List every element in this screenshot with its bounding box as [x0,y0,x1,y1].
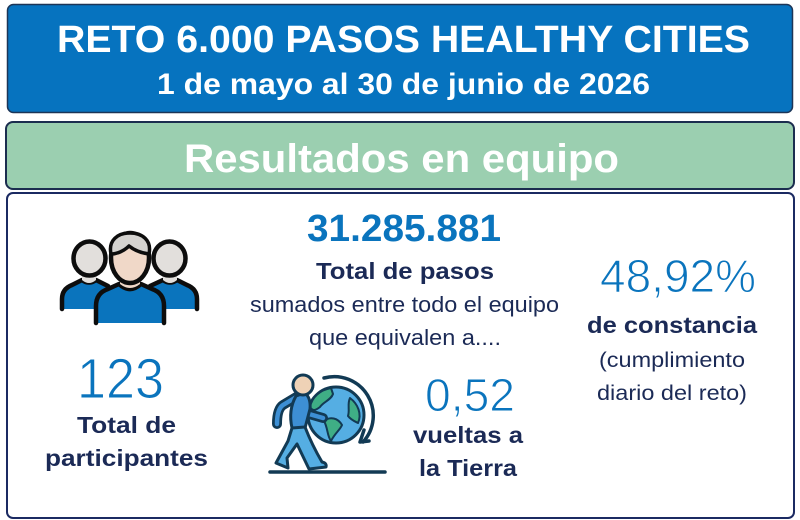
title: RETO 6.000 PASOS HEALTHY CITIES [57,19,750,61]
icon: person walking around the globe [270,375,385,472]
description: (cumplimiento [599,349,745,372]
stat: consistency [587,250,757,405]
stat: participants [45,347,208,471]
number: 48,92% [600,250,756,302]
panel: results [7,193,794,518]
description second line: diario del reto) [597,382,747,405]
date range subtitle: 1 de mayo al 30 de junio de 2026 [157,68,650,101]
number: 0,52 [425,369,515,421]
stat: earth laps [413,369,523,481]
number: 123 [77,347,164,411]
panel: section heading [6,122,794,189]
heading: Resultados en equipo [184,137,619,181]
icon: group of people [62,233,197,323]
number: 31.285.881 [307,208,501,250]
panel: header [8,4,792,112]
label: vueltas a [413,422,523,448]
label: de constancia [587,312,757,338]
label: Total de pasos [316,258,494,284]
label: Total de [77,412,176,438]
label second line: participantes [45,445,208,471]
description second line: que equivalen a.... [309,325,501,350]
stat: total steps [250,208,559,350]
label second line: la Tierra [419,455,517,481]
description: sumados entre todo el equipo [250,292,559,317]
